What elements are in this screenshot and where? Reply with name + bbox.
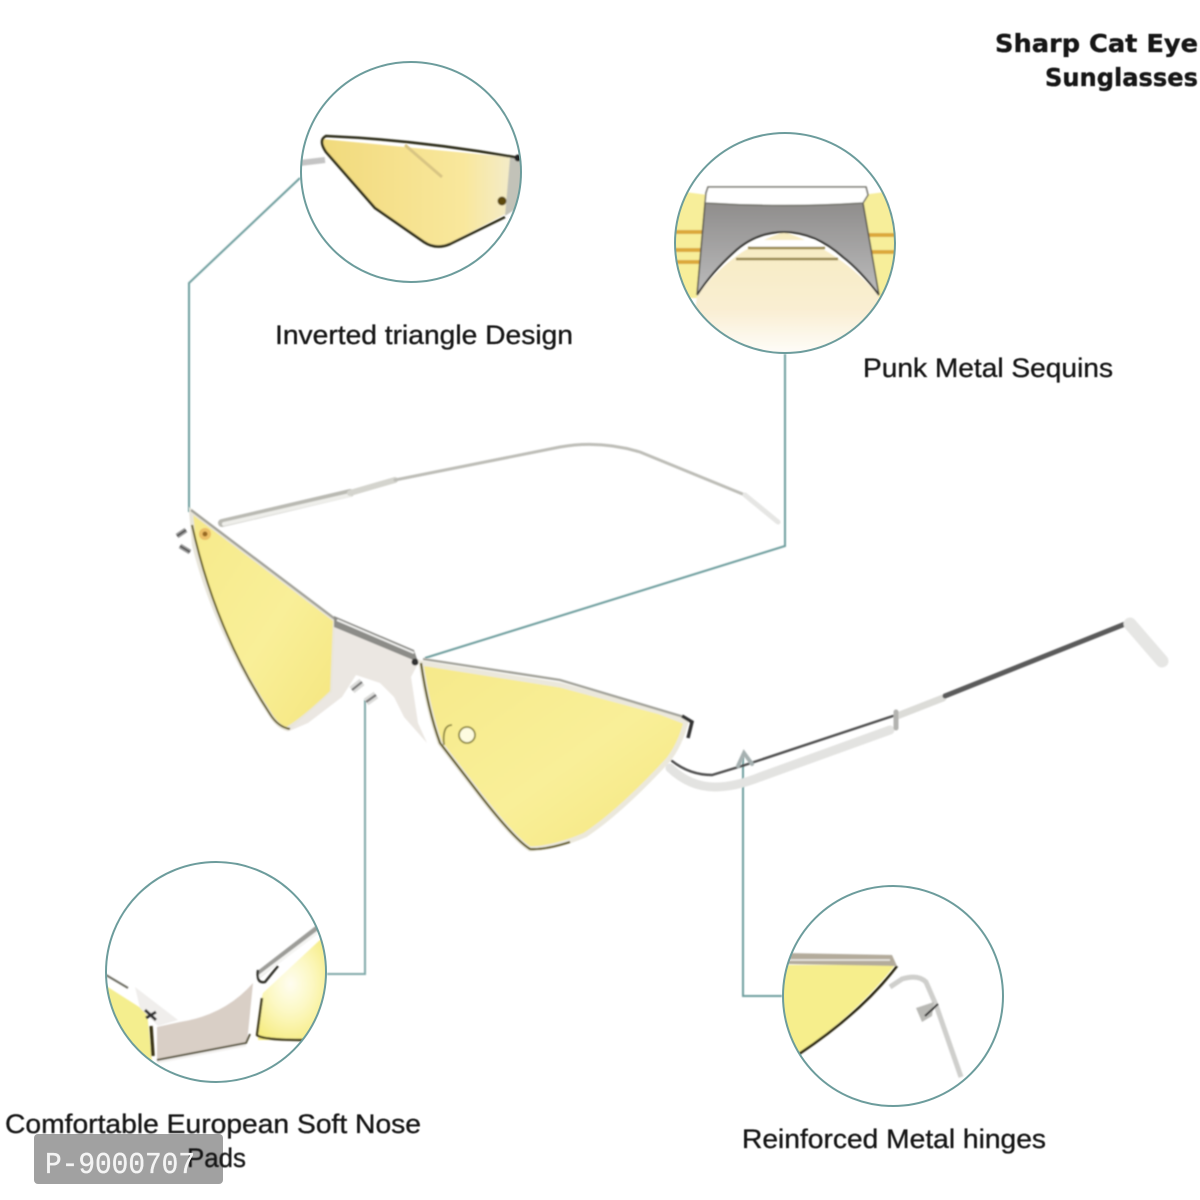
label: nose pads: Pads — [187, 1143, 246, 1173]
far temple arm — [222, 444, 778, 524]
detail arm — [890, 977, 961, 1077]
title: Sunglasses — [1045, 63, 1198, 92]
label: inverted triangle: Inverted triangle Design — [275, 320, 573, 350]
detail right lens — [257, 939, 325, 1041]
bridge — [287, 623, 427, 743]
watermark code: P-9000707 — [45, 1148, 195, 1183]
leader lines — [189, 178, 785, 996]
panel: hinges detail — [780, 886, 1003, 1106]
near temple arm — [670, 622, 1162, 787]
hinge corner — [682, 716, 692, 738]
label: nose pads: Comfortable European Soft Nose — [5, 1109, 421, 1139]
panel: punk metal detail — [670, 133, 900, 360]
watermark badge — [34, 1134, 223, 1184]
sunglasses — [177, 444, 1162, 849]
detail bridge — [157, 983, 253, 1060]
detail lower lens — [696, 232, 880, 350]
title — [995, 29, 1198, 92]
nose pads — [352, 682, 376, 702]
detail lens — [780, 965, 895, 1060]
label: hinges: Reinforced Metal hinges — [742, 1124, 1046, 1154]
panel: inverted triangle detail — [300, 62, 522, 282]
bridge top bar — [334, 616, 418, 662]
title: Sharp Cat Eye — [995, 29, 1198, 58]
right lens — [421, 663, 686, 849]
detail frame — [258, 927, 320, 975]
detail side lenses — [676, 192, 706, 299]
detail bridge — [697, 203, 879, 295]
detail left lens — [108, 986, 153, 1060]
detail lens — [322, 139, 519, 247]
label: punk metal: Punk Metal Sequins — [863, 353, 1113, 383]
detail top rim — [784, 953, 897, 966]
panel: nose pads detail — [100, 862, 335, 1082]
lens reflection — [444, 725, 475, 745]
left lens — [191, 511, 335, 729]
detail top bar — [705, 187, 868, 206]
label: nose pads — [5, 1109, 421, 1173]
left screw — [199, 528, 211, 540]
